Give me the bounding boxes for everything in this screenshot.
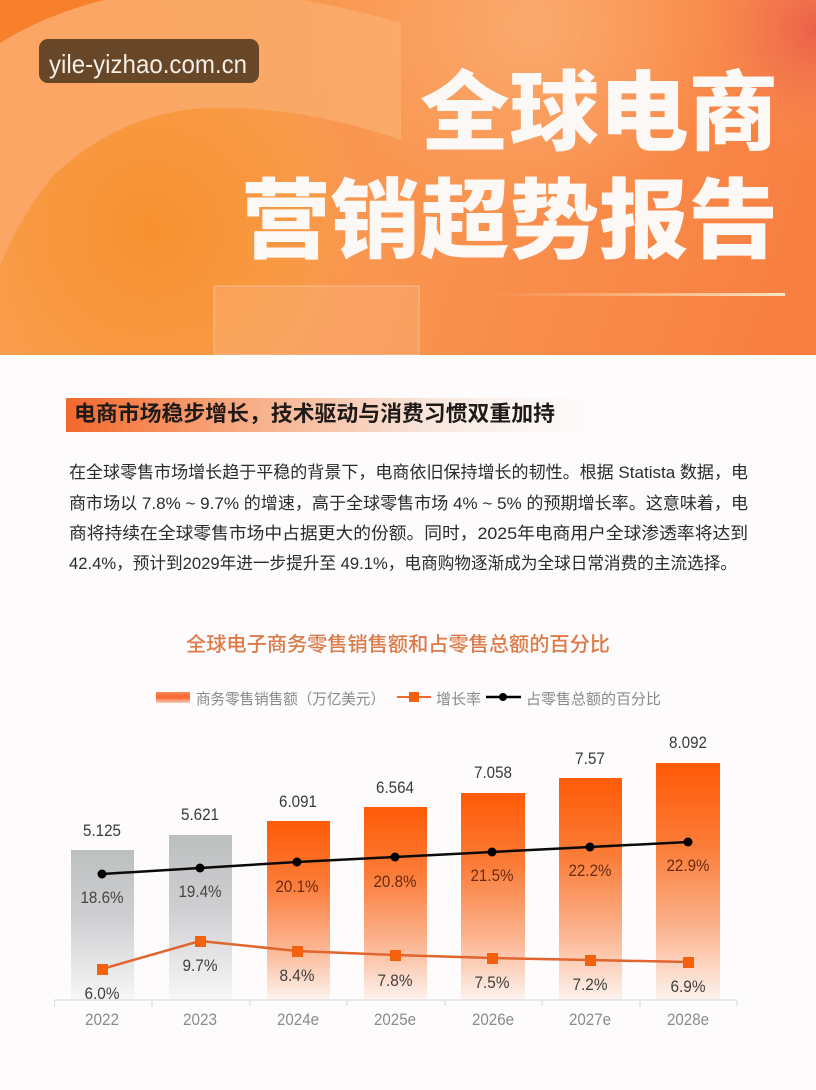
panel: orange header banner [0,0,816,355]
share percentage labels: 22.9% [666,856,710,875]
share percentage labels: 20.8% [374,872,416,891]
x axis year labels: 2024e [277,1011,319,1029]
x axis year labels [85,1011,709,1029]
site watermark badge [39,39,259,83]
growth percentage labels: 9.7% [182,956,218,975]
x axis year labels: 2023 [183,1011,217,1029]
bar value labels: 7.058 [474,763,512,782]
growth percentage labels: 6.0% [84,984,120,1003]
body text: 42.4%，预计到2029年进一步提升至 49.1%，电商购物逐渐成为全球日常消费的主流选择。 [69,554,737,573]
site watermark badge: yile-yizhao.com.cn [49,49,247,79]
line: share of total retail [98,838,692,878]
share percentage labels [80,856,710,907]
share percentage labels: 18.6% [80,888,124,907]
body text: 商将持续在全球零售市场中占据更大的份额。同时，2025年电商用户全球渗透率将达到 [69,524,748,543]
share percentage labels: 20.1% [276,877,318,896]
growth percentage labels [84,956,706,1003]
line: growth rate [97,936,694,975]
section heading: 电商市场稳步增长，技术驱动与消费习惯双重加持 [74,397,555,428]
x axis year labels: 2025e [374,1011,416,1029]
x axis year labels: 2022 [85,1011,119,1029]
bar value labels: 5.125 [83,821,121,840]
share percentage labels: 22.2% [568,861,612,880]
bar value labels: 6.564 [376,778,414,797]
x axis year labels: 2026e [472,1011,514,1029]
x axis year labels: 2027e [569,1011,611,1029]
chart legend [156,691,661,708]
bar value labels: 5.621 [181,805,219,824]
share percentage labels: 19.4% [178,882,222,901]
growth percentage labels: 7.5% [474,973,510,992]
bar value labels: 8.092 [669,733,707,752]
growth percentage labels: 8.4% [280,966,314,985]
title: 全球电商 [420,43,778,169]
bar value labels: 7.57 [575,749,605,768]
growth percentage labels: 7.8% [378,971,412,990]
title: 营销超势报告 [241,151,778,277]
growth percentage labels: 7.2% [572,975,608,994]
growth percentage labels: 6.9% [670,977,706,996]
bar value labels: 6.091 [279,792,317,811]
chart legend: 增长率 [436,691,481,708]
body text: 在全球零售市场增长趋于平稳的背景下，电商依旧保持增长的韧性。根据 Statista 数据，电 [69,463,748,482]
x axis year labels: 2028e [667,1011,709,1029]
title underline [487,293,785,296]
x axis [54,1000,737,1006]
chart legend: 商务零售销售额（万亿美元） [196,691,385,708]
title [241,43,778,277]
body text: 商市场以 7.8% ~ 9.7% 的增速，高于全球零售市场 4% ~ 5% 的预期增长率。这意味着，电 [69,494,748,513]
bar chart: e-commerce sales [71,763,720,1000]
chart legend: 占零售总额的百分比 [526,691,661,708]
bar value labels [83,733,707,840]
chart title: 全球电子商务零售销售额和占零售总额的百分比 [186,628,610,657]
share percentage labels: 21.5% [470,866,514,885]
body text [69,463,748,573]
